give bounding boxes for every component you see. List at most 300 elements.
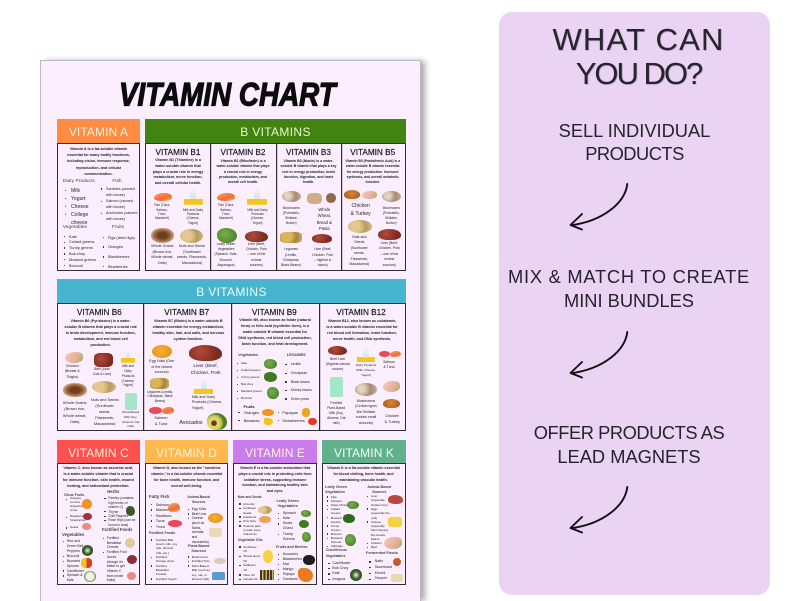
- label: nuts: Seeds: [354, 240, 364, 244]
- label: egg yolks: sources): [155, 370, 169, 374]
- label: mushrooms: Mushrooms: [357, 398, 375, 402]
- heading: plant-based sources: Plant-Based: [188, 544, 209, 548]
- label: chicken and turkey: Chicken: [385, 413, 399, 418]
- list: fish: [101, 187, 138, 221]
- icon: plant milk: [330, 377, 343, 397]
- text: B1 description: water-soluble vitamin that: [155, 164, 201, 168]
- label: plant milk: [327, 401, 345, 426]
- text: vitamin A description: Vitamin A is a fat-soluble vitamin: [70, 147, 127, 151]
- label: nuts: [177, 244, 207, 265]
- text: vitamin C description: healing, and antioxidant protection.: [67, 484, 129, 488]
- text: B12 description: red blood cell formation, brain function,: [327, 331, 397, 335]
- heading: animal-based sources: [187, 495, 210, 504]
- heading: B3: VITAMIN B3: [286, 148, 331, 156]
- list: leafy greens: Broccoli: [331, 532, 341, 536]
- list: guava: Guava: [70, 525, 78, 529]
- text: B6 description: [64, 319, 137, 347]
- list: vegetables: Broccoli: [67, 554, 79, 558]
- label: liver: richest: [251, 258, 261, 262]
- label: milk: (Cheese,: [122, 379, 134, 383]
- icon: milk: [194, 380, 213, 394]
- list: fish: with bones): [106, 193, 125, 197]
- label: leafy greens: Leafy Green: [217, 242, 235, 246]
- icon: milk: [247, 189, 267, 205]
- label: whole wheat: [317, 207, 332, 231]
- list: fortified foods: Fortified: [156, 555, 167, 559]
- list: fortified foods: [156, 538, 177, 581]
- list: fruits and berries: Mango: [283, 567, 293, 571]
- label: egg yolks: [149, 359, 174, 374]
- list: dairy products: College: [71, 212, 88, 218]
- text: B3 description: Vitamin B3 (Niacin) is a water-: [284, 159, 333, 163]
- list: fruits right: Strawberries: [282, 418, 305, 423]
- column: vitamin B9: [231, 304, 319, 431]
- label: liver: Chicken, Pork: [312, 253, 333, 257]
- icon: berries: [83, 513, 92, 520]
- list: leafy greens: Turnip: [331, 524, 339, 528]
- icon: legumes: [150, 378, 169, 389]
- text: sell individual products: SELL INDIVIDUAL: [559, 120, 710, 141]
- list: legumes: [291, 360, 312, 403]
- icon: beef liver: [328, 346, 347, 355]
- heading: B7: VITAMIN B7: [164, 308, 209, 316]
- icon: orange: [82, 499, 92, 509]
- label: mushrooms: Shiitake,: [385, 216, 398, 220]
- list: fish: Anchovies (canned: [106, 211, 137, 215]
- label: beef: [92, 367, 111, 376]
- list: leafy greens: Kale: [283, 516, 290, 520]
- icon: whole grains: [63, 383, 87, 397]
- icon: oranges: [262, 409, 274, 416]
- label: liver: Chicken, Pork: [379, 246, 400, 250]
- icon: peanuts: [259, 516, 271, 523]
- label: egg yolks: Egg Yolks (One: [149, 359, 174, 363]
- text: offer products as lead magnets: LEAD MAGNETS: [557, 446, 701, 467]
- list: vegetables: Mustard greens: [69, 257, 96, 262]
- list: animal-based sources: Eggs: [371, 507, 378, 511]
- text: B6 description: metabolism, and red blood cell: [74, 337, 128, 341]
- list: vegetables: Collard greens: [241, 368, 261, 372]
- list: vegetables: Bok choy: [241, 382, 253, 386]
- icon: turkey: [383, 399, 400, 408]
- text: vitamin K description: for blood clotting, bone health, and: [333, 472, 394, 476]
- list: fortified foods: [107, 536, 127, 583]
- label: legumes: Chickpeas, Black: [147, 394, 173, 398]
- list: cruciferous vegetables: [332, 561, 351, 582]
- label: nuts: seeds,: [99, 409, 110, 414]
- list: fruits and berries: Blackberries: [283, 557, 302, 561]
- list: vegetables: Collard greens: [69, 239, 94, 244]
- list: fortified foods: Fortified Milk: [156, 538, 173, 542]
- label: whole grains: [151, 244, 174, 265]
- list: fortified foods: (cow's milk, soy: [156, 542, 177, 546]
- list: fortified foods: better to get: [107, 564, 125, 568]
- heading: citrus fruits: Citrus Fruits: [64, 493, 84, 497]
- heading: B1: VITAMIN B1: [156, 148, 200, 156]
- label: liver: sources): [383, 263, 396, 267]
- label: chicken and turkey: & Turkey: [385, 419, 400, 424]
- text: vitamin C description: [63, 466, 134, 490]
- column: vitamin B1: [151, 148, 207, 265]
- label: liver: richest: [384, 257, 394, 261]
- label: nuts: Macadamia): [182, 261, 202, 265]
- text: B3 description: soluble B vitamin that plays a key: [280, 164, 337, 168]
- text: B7 description: healthy skin, hair, and nails, and nervous: [152, 331, 224, 335]
- text: B5 description: water-soluble B vitamin essential: [346, 164, 399, 168]
- text: vitamin D description: vitamin," is a fat-soluble vitamin essential: [151, 472, 222, 476]
- text: vitamin D description: [151, 466, 222, 490]
- panel: B vitamins blue: [57, 279, 406, 431]
- list: vegetables: Peppers: [67, 549, 80, 553]
- label: salmon and tuna: Salmon: [383, 360, 395, 364]
- list: animal-based sources: cheddar,: [192, 530, 204, 534]
- list: nuts and seeds: Almonds: [243, 502, 255, 506]
- label: salmon and tuna: [383, 360, 395, 371]
- heading: fortified foods: Fortified Foods: [149, 531, 175, 535]
- heading: B5: VITAMIN B5: [350, 148, 395, 156]
- icon: liver: [312, 234, 332, 243]
- list: animal-based sources: [371, 494, 389, 550]
- icon: salmon: [162, 407, 174, 414]
- text: B3 description: [280, 159, 337, 184]
- text: vitamin A description: [67, 147, 130, 176]
- label: plant milk: Milk (Soy,: [124, 415, 137, 419]
- list: animal-based sources: Cheese: [192, 516, 203, 520]
- icon: broccoli: [267, 387, 279, 399]
- text: B2 description: overall cell health.: [228, 180, 258, 184]
- label: avocados: Avocados: [179, 420, 203, 426]
- icon: whole grains: [150, 228, 174, 243]
- list: fortified foods: milk, etc.): [156, 551, 169, 555]
- heading: vitamin K: VITAMIN K: [334, 446, 394, 460]
- list: vegetables: Broccoli: [241, 396, 252, 400]
- icon: banana: [264, 418, 273, 425]
- list: vegetables: Spinach &: [67, 573, 83, 577]
- list: vegetables: [64, 234, 96, 268]
- list: nuts and seeds: Vitamin E): [243, 532, 257, 536]
- icon: cheese: [209, 528, 222, 537]
- list: fortified foods: Fortified: [107, 536, 119, 540]
- list: herbs: Thyme: [108, 510, 118, 514]
- icon: egg yolks: [208, 513, 223, 523]
- label: liver: Liver (Beef,: [381, 241, 398, 245]
- label: chicken: Thighs): [66, 375, 78, 379]
- text: B1 description: Vitamin B1 (Thiamine) is a: [155, 158, 201, 162]
- label: fish: Mackerel): [155, 216, 169, 220]
- icon: whole wheat roll: [326, 193, 336, 203]
- list: fruits: Figs (dried figs): [108, 234, 135, 240]
- list: citrus: [70, 497, 85, 512]
- icon: milk: [121, 350, 135, 363]
- icon: kale: [299, 520, 309, 528]
- list: dairy products: cheese: [71, 220, 87, 226]
- label: beef liver: Beef Liver: [330, 357, 345, 361]
- label: beef liver: source): [332, 367, 343, 371]
- label: salmon and tuna: & Tuna: [155, 421, 167, 426]
- heading: vegetable oils: Vegetable Oils: [238, 538, 263, 542]
- list: vegetables: Bok choy: [69, 251, 85, 256]
- icon: bread: [307, 193, 322, 204]
- list: vegetables: Turnip greens: [69, 245, 93, 250]
- label: plant milk: milk): [333, 421, 340, 425]
- list: animal-based sources: (especially: [371, 498, 385, 502]
- label: milk: Products: [251, 212, 264, 216]
- text: B12 description: nerve health, and DNA synthesis.: [333, 337, 391, 341]
- icon: plant milk: [125, 393, 137, 410]
- heading: dairy products: Dairy Products: [63, 179, 95, 184]
- heading: leafy greens: Vegetables: [325, 490, 345, 494]
- icon: salmon: [154, 193, 172, 201]
- label: whole grains: Whole wheat,: [151, 255, 173, 259]
- text: B7 description: [152, 319, 224, 341]
- label: beef liver: (Highest natural: [326, 362, 350, 366]
- icon: juice fruit: [127, 555, 137, 564]
- icon: turnip greens: [302, 532, 311, 542]
- list: vegetables: [67, 539, 84, 583]
- list: leafy greens: Greens: [331, 528, 341, 532]
- label: plant milk: Plant-Based: [327, 406, 345, 410]
- text: B2 description: production, metabolism, and: [219, 175, 267, 179]
- text: vitamin K description: maintaining vascular health.: [339, 478, 388, 482]
- text: vitamin K description: [327, 466, 400, 483]
- label: mushrooms: Mushrooms: [283, 206, 300, 210]
- label: whole grains: Whole wheat,: [63, 413, 86, 418]
- list: plant-based sources: Mushrooms: [192, 555, 208, 559]
- heading: animal-based sources: Animal-Based: [187, 495, 210, 499]
- label: egg yolks: of the richest: [151, 365, 172, 369]
- list: leafy greens: [331, 495, 348, 549]
- list: herbs: Parsley (contains: [108, 496, 134, 500]
- text: B9 description: brain function, and fetal development.: [242, 342, 308, 346]
- heading: fruits: Fruits: [112, 225, 124, 230]
- list: vegetables: Broccoli: [69, 263, 83, 268]
- list: herbs: found in teas): [108, 523, 128, 527]
- list: fruits and berries: Papaya: [283, 572, 295, 576]
- list: dairy products: Yogurt: [71, 196, 86, 202]
- text: B1 description: metabolism, nerve function,: [154, 175, 202, 179]
- list: vegetables: Kale: [67, 578, 74, 582]
- label: leafy greens: [214, 242, 238, 267]
- text: vitamin D description: for bone health, immune function, and: [154, 478, 219, 482]
- label: legumes: Beans): [155, 399, 165, 403]
- list: plant-based sources: Plant-Based: [192, 564, 209, 568]
- panel: vitamin C: [57, 440, 140, 585]
- list: fruits and berries: Tomatoes: [283, 577, 298, 581]
- list: berries: Raspberries &: [70, 514, 88, 518]
- list: legumes: Chickpeas: [291, 371, 307, 375]
- heading: herbs: Herbs: [107, 489, 119, 494]
- list: animal-based sources: like Gouda,: [371, 533, 386, 537]
- heading: cruciferous vegetables: Cruciferous: [326, 548, 347, 552]
- list: herbs: high levels of: [108, 501, 128, 505]
- text: mix and match: MINI BUNDLES: [564, 290, 694, 311]
- label: plant milk: milk): [127, 424, 134, 428]
- text: B5 description: function.: [366, 180, 380, 184]
- label: nuts: (Sunflower: [183, 250, 201, 254]
- arrow 2: [560, 323, 640, 383]
- list: fruits and berries: [283, 552, 302, 582]
- label: fish: Trout,: [158, 212, 166, 216]
- list: fruits and berries: Avocados: [283, 552, 298, 556]
- heading: fortified foods: Fortified Foods: [102, 527, 132, 532]
- list: fortified foods: Fortified Fruit: [107, 550, 127, 554]
- column: vitamin B5: [341, 144, 406, 271]
- icon: broccoli: [82, 545, 93, 556]
- text: B1 description: and overall cellular health.: [155, 181, 201, 185]
- label: mushrooms: [355, 398, 377, 426]
- icon: nuts: [258, 506, 272, 514]
- heading: B vitamins: [57, 279, 406, 304]
- heading: vitamin D: VITAMIN D: [156, 446, 217, 460]
- heading: animal-based sources: Sources: [372, 490, 386, 494]
- label: mushrooms: (Certain types: [355, 404, 377, 408]
- label: milk: Products: [187, 212, 199, 216]
- icon: oil bottles: [260, 570, 274, 580]
- label: liver: sources): [250, 263, 263, 267]
- label: milk: (Cheese,: [187, 216, 199, 220]
- text: B1 description: [153, 158, 204, 185]
- label: whole wheat: Pasta: [319, 226, 330, 231]
- list: cruciferous vegetables: Bok Choy: [332, 566, 348, 570]
- label: milk: Products: [122, 374, 134, 378]
- text: vitamin A description: including vision, immune response,: [67, 159, 130, 163]
- list: nuts and seeds: provide some: [243, 528, 261, 532]
- list: nuts and seeds: Peanuts (also: [243, 524, 261, 528]
- list: plant-based sources: soy, oat, or: [192, 573, 207, 577]
- label: dairy: Dairy Products: [356, 363, 376, 367]
- list: vegetable oils: Sunflower: [243, 545, 257, 549]
- list: animal-based sources: hard cheeses: [371, 528, 388, 532]
- label: fish: Salmon,: [220, 208, 232, 212]
- column: vitamin B7: [143, 304, 231, 431]
- icon: mushrooms: [382, 191, 401, 202]
- icon: chicken: [362, 191, 377, 199]
- label: beef liver: [326, 357, 350, 372]
- label: nuts: (Sunflower: [95, 403, 114, 408]
- list: fatty fish: Salmon: [156, 502, 169, 507]
- list: plant-based sources: [192, 555, 210, 582]
- icon: tempeh: [391, 574, 403, 582]
- label: milk: Yogurt): [123, 383, 133, 387]
- label: beef: Beef (Lean: [94, 367, 110, 371]
- label: nuts: Nuts and: [352, 234, 366, 238]
- label: chicken: Chicken: [66, 364, 79, 368]
- text: B5 description: for energy production, hormone: [347, 170, 398, 174]
- label: whole wheat: Bread &: [317, 220, 332, 225]
- list: fermented foods: Sauerkraut: [375, 565, 392, 569]
- heading: leafy greens: Leafy Green: [276, 498, 299, 503]
- text: B9 description: DNA synthesis, red blood cell production,: [238, 336, 312, 340]
- list: fatty fish: [156, 502, 172, 529]
- list: animal-based sources: Egg Yolks: [192, 507, 206, 511]
- text: B1 description: plays a crucial role in energy: [153, 170, 203, 174]
- list: nuts and seeds: Seeds: [243, 511, 252, 515]
- list: vegetable oils: Oil: [243, 549, 247, 553]
- text: vitamin A description: reproduction, and cellular: [76, 166, 121, 170]
- list: berries: Strawberries: [70, 518, 86, 522]
- icon: nuts: [92, 381, 116, 393]
- label: liver: [312, 247, 334, 267]
- label: nuts: Macadamia): [349, 262, 369, 266]
- list: fruits: Blueberries: [108, 264, 128, 269]
- text: vitamin E description: [238, 466, 312, 494]
- icon: leafy greens: [216, 228, 236, 243]
- list: leafy greens: Greens: [331, 511, 341, 515]
- list: animal-based sources: [192, 507, 209, 544]
- list: leafy greens: Greens: [283, 537, 295, 541]
- list: nuts and seeds: [243, 502, 261, 537]
- text: B5 description: synthesis, and overall metabolic: [347, 175, 399, 179]
- list: vegetable oils: Oil: [243, 568, 247, 572]
- icon: spinach: [347, 501, 359, 509]
- list: vegetables: Kale: [241, 361, 247, 365]
- label: fish: Fish (Tuna,: [218, 203, 234, 207]
- label: mushrooms: Button): [286, 221, 297, 225]
- heading: vitamin A: VITAMIN A: [69, 125, 128, 139]
- label: leafy greens: Asparagus): [217, 263, 235, 267]
- icon: papaya: [302, 408, 310, 417]
- list: cruciferous vegetables: Kale: [332, 571, 340, 575]
- label: milk: Milk and: [122, 364, 134, 368]
- list: nuts and seeds: Pine Nuts: [243, 519, 256, 523]
- label: whole grains: (Brown rice,: [152, 250, 172, 254]
- label: plant milk: Fortified: [330, 401, 342, 405]
- list: vegetable oils: Wheat Germ: [243, 554, 260, 558]
- label: mushrooms: Shiitake,: [285, 216, 298, 220]
- icon: liver: [189, 345, 222, 361]
- list: animal-based sources: yolk): [371, 516, 377, 520]
- text: B7 description: Vitamin B7 (Biotin) is a water-soluble B: [154, 319, 223, 323]
- list: fortified foods: Breakfast: [107, 541, 121, 545]
- heading: legumes: LEGUMES: [287, 353, 306, 357]
- icon: kale: [343, 514, 355, 523]
- heading: animal-based sources: [367, 485, 391, 494]
- label: whole wheat: Wheat,: [318, 213, 331, 218]
- list: fortified foods: Breakfast: [156, 568, 169, 572]
- icon: beef: [94, 353, 113, 367]
- list: leafy greens: Spinach: [283, 511, 296, 515]
- label: milk: Milk and Dairy: [247, 208, 268, 212]
- label: liver: Liver (Beef,: [248, 242, 265, 246]
- list: nuts and seeds: Hazelnuts: [243, 515, 256, 519]
- label: milk: Milk and Dairy: [192, 394, 215, 398]
- heading: vitamin C: VITAMIN C: [68, 446, 129, 460]
- list: fermented foods: Natto: [375, 559, 383, 563]
- list: plant-based sources: Milk (such as: [192, 568, 210, 572]
- label: chicken and turkey: [350, 202, 371, 217]
- icon: liver: [378, 229, 401, 240]
- list: leafy greens: Sprouts: [331, 540, 341, 544]
- heading: vegetables: Vegetables: [63, 225, 87, 230]
- label: fish: [218, 203, 234, 220]
- label: milk: Milk and Dairy: [183, 208, 203, 212]
- list: vegetables: [241, 360, 262, 402]
- label: fish: Fish (Tuna,: [154, 203, 170, 207]
- label: dairy: [356, 363, 376, 378]
- icon: liver: [245, 231, 268, 242]
- text: B3 description: health.: [303, 180, 314, 184]
- list: fruits left: Oranges: [244, 410, 259, 415]
- label: plant milk: Almond, Oat: [327, 416, 345, 420]
- icon: spinach: [301, 510, 311, 517]
- list: citrus: Limes: [70, 508, 77, 512]
- heading: B2: VITAMIN B2: [221, 148, 265, 156]
- label: milk: [192, 394, 222, 410]
- label: fish: [154, 203, 170, 220]
- column: vitamin B2: [210, 144, 276, 271]
- heading: B vitamins: B VITAMINS: [196, 285, 267, 299]
- icon: salmon: [168, 503, 180, 512]
